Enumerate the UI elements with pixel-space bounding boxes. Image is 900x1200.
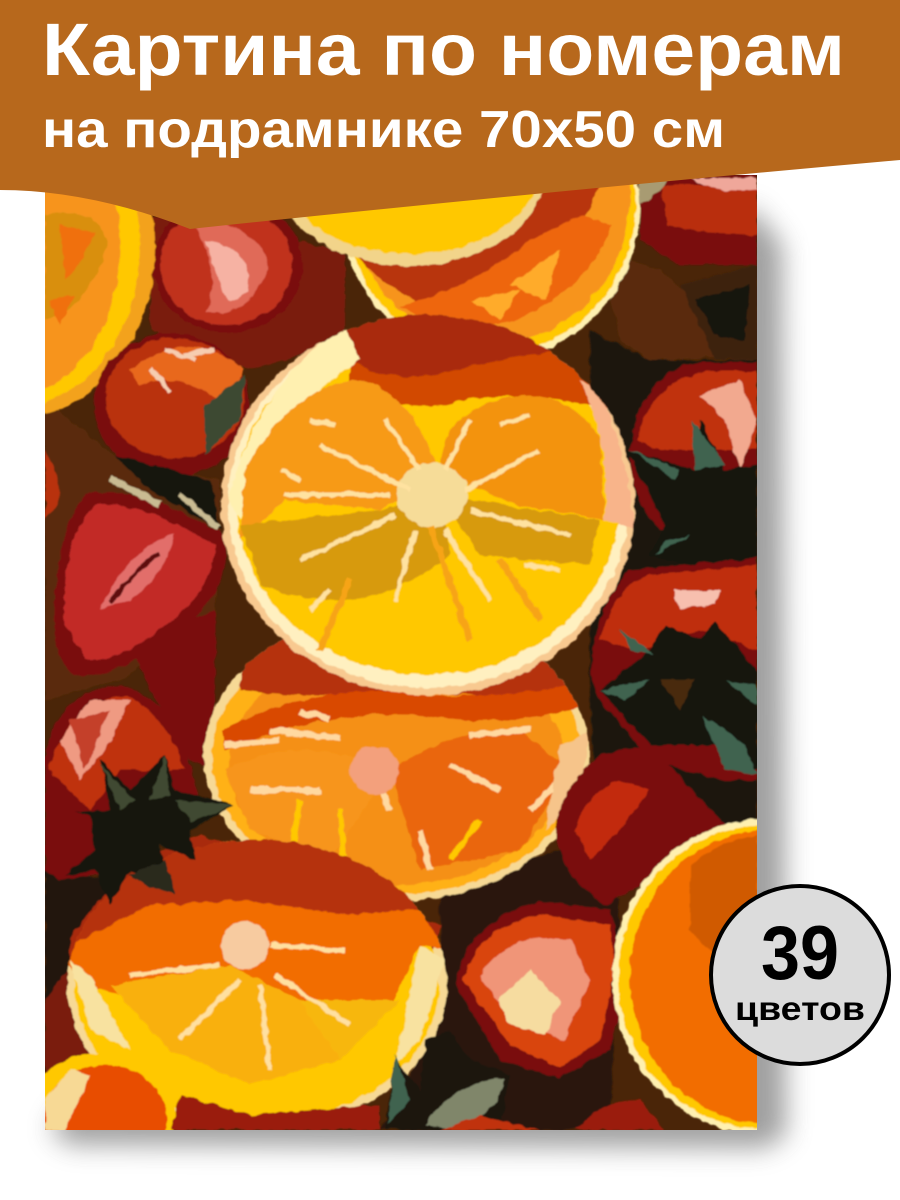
background dark areas <box>45 400 220 700</box>
strawberry left upper <box>94 333 250 477</box>
orange F: bottom right <box>612 819 900 1135</box>
strawberry top right <box>640 175 757 265</box>
orange D: top small yellow <box>291 193 544 268</box>
subtitle: на подрамнике 70х50 см <box>42 101 725 159</box>
strawberry right dark <box>556 745 725 905</box>
orange G: top left <box>0 73 155 417</box>
strawberry right upper <box>630 362 757 530</box>
badge: 39 colours: цветов <box>735 990 865 1027</box>
badge: 39 colours <box>711 886 889 1064</box>
badge: 39 colours: 39 <box>761 911 839 996</box>
orange A: main slice <box>221 315 635 695</box>
orange B: middle <box>204 611 590 901</box>
strawberry left lower <box>45 685 200 880</box>
strawberry bottom centre <box>456 902 628 1078</box>
strawberry right middle <box>592 558 757 780</box>
strawberry left cut <box>54 492 226 676</box>
strawberry top left <box>153 220 303 332</box>
orange H: bottom left small <box>45 1052 178 1130</box>
banner <box>0 0 900 229</box>
painting: oranges and strawberries <box>45 175 757 1130</box>
title: Картина по номерам <box>42 8 845 91</box>
orange C: top right <box>346 184 642 350</box>
canvas shadow <box>50 205 786 1148</box>
orange E: bottom left <box>67 840 447 1130</box>
leaves bottom <box>385 1030 510 1130</box>
strawberry leaves left <box>65 755 235 905</box>
